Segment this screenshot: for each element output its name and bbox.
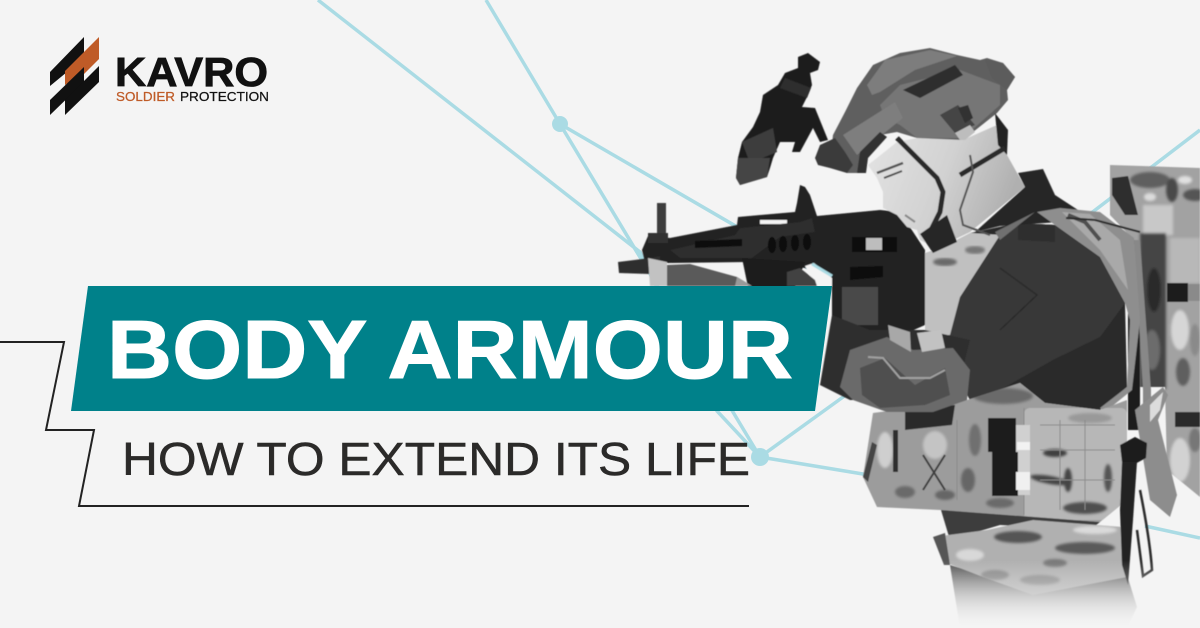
outline frame behind subtitle [0, 342, 749, 506]
waist [941, 510, 1100, 540]
chin straps [897, 138, 1005, 253]
soldier figure [618, 48, 1200, 628]
title banner [71, 286, 832, 411]
logo tagline: protection: PROTECTION [180, 89, 269, 104]
helmet [830, 48, 1015, 173]
network lines backdrop [318, 0, 1200, 538]
logo wordmark: KAVRO [115, 49, 268, 95]
rifle [618, 185, 925, 345]
trousers fading out [950, 565, 1137, 628]
bottom fade over the figure [930, 560, 1160, 628]
night vision monocular [736, 53, 853, 185]
subtitle: HOW TO EXTEND ITS LIFE [122, 433, 750, 485]
pistol and dangling strap [1120, 437, 1152, 585]
vest shoulder strap [1037, 208, 1140, 412]
collar [975, 169, 1078, 232]
logo mark [50, 37, 99, 115]
pack side straps [1128, 240, 1177, 517]
lower vest with pouches [863, 383, 1127, 522]
jacket torso [940, 223, 1127, 410]
forearm sleeve [820, 315, 970, 400]
title text: BODY ARMOUR [107, 303, 793, 396]
neck and face [868, 125, 1025, 245]
elbow pad [840, 325, 970, 412]
chest vest camo [925, 212, 1035, 335]
backpack [1110, 165, 1200, 497]
logo [50, 37, 269, 115]
belt pouch camo [933, 520, 1127, 595]
logo tagline: soldier: SOLDIER [116, 89, 175, 104]
